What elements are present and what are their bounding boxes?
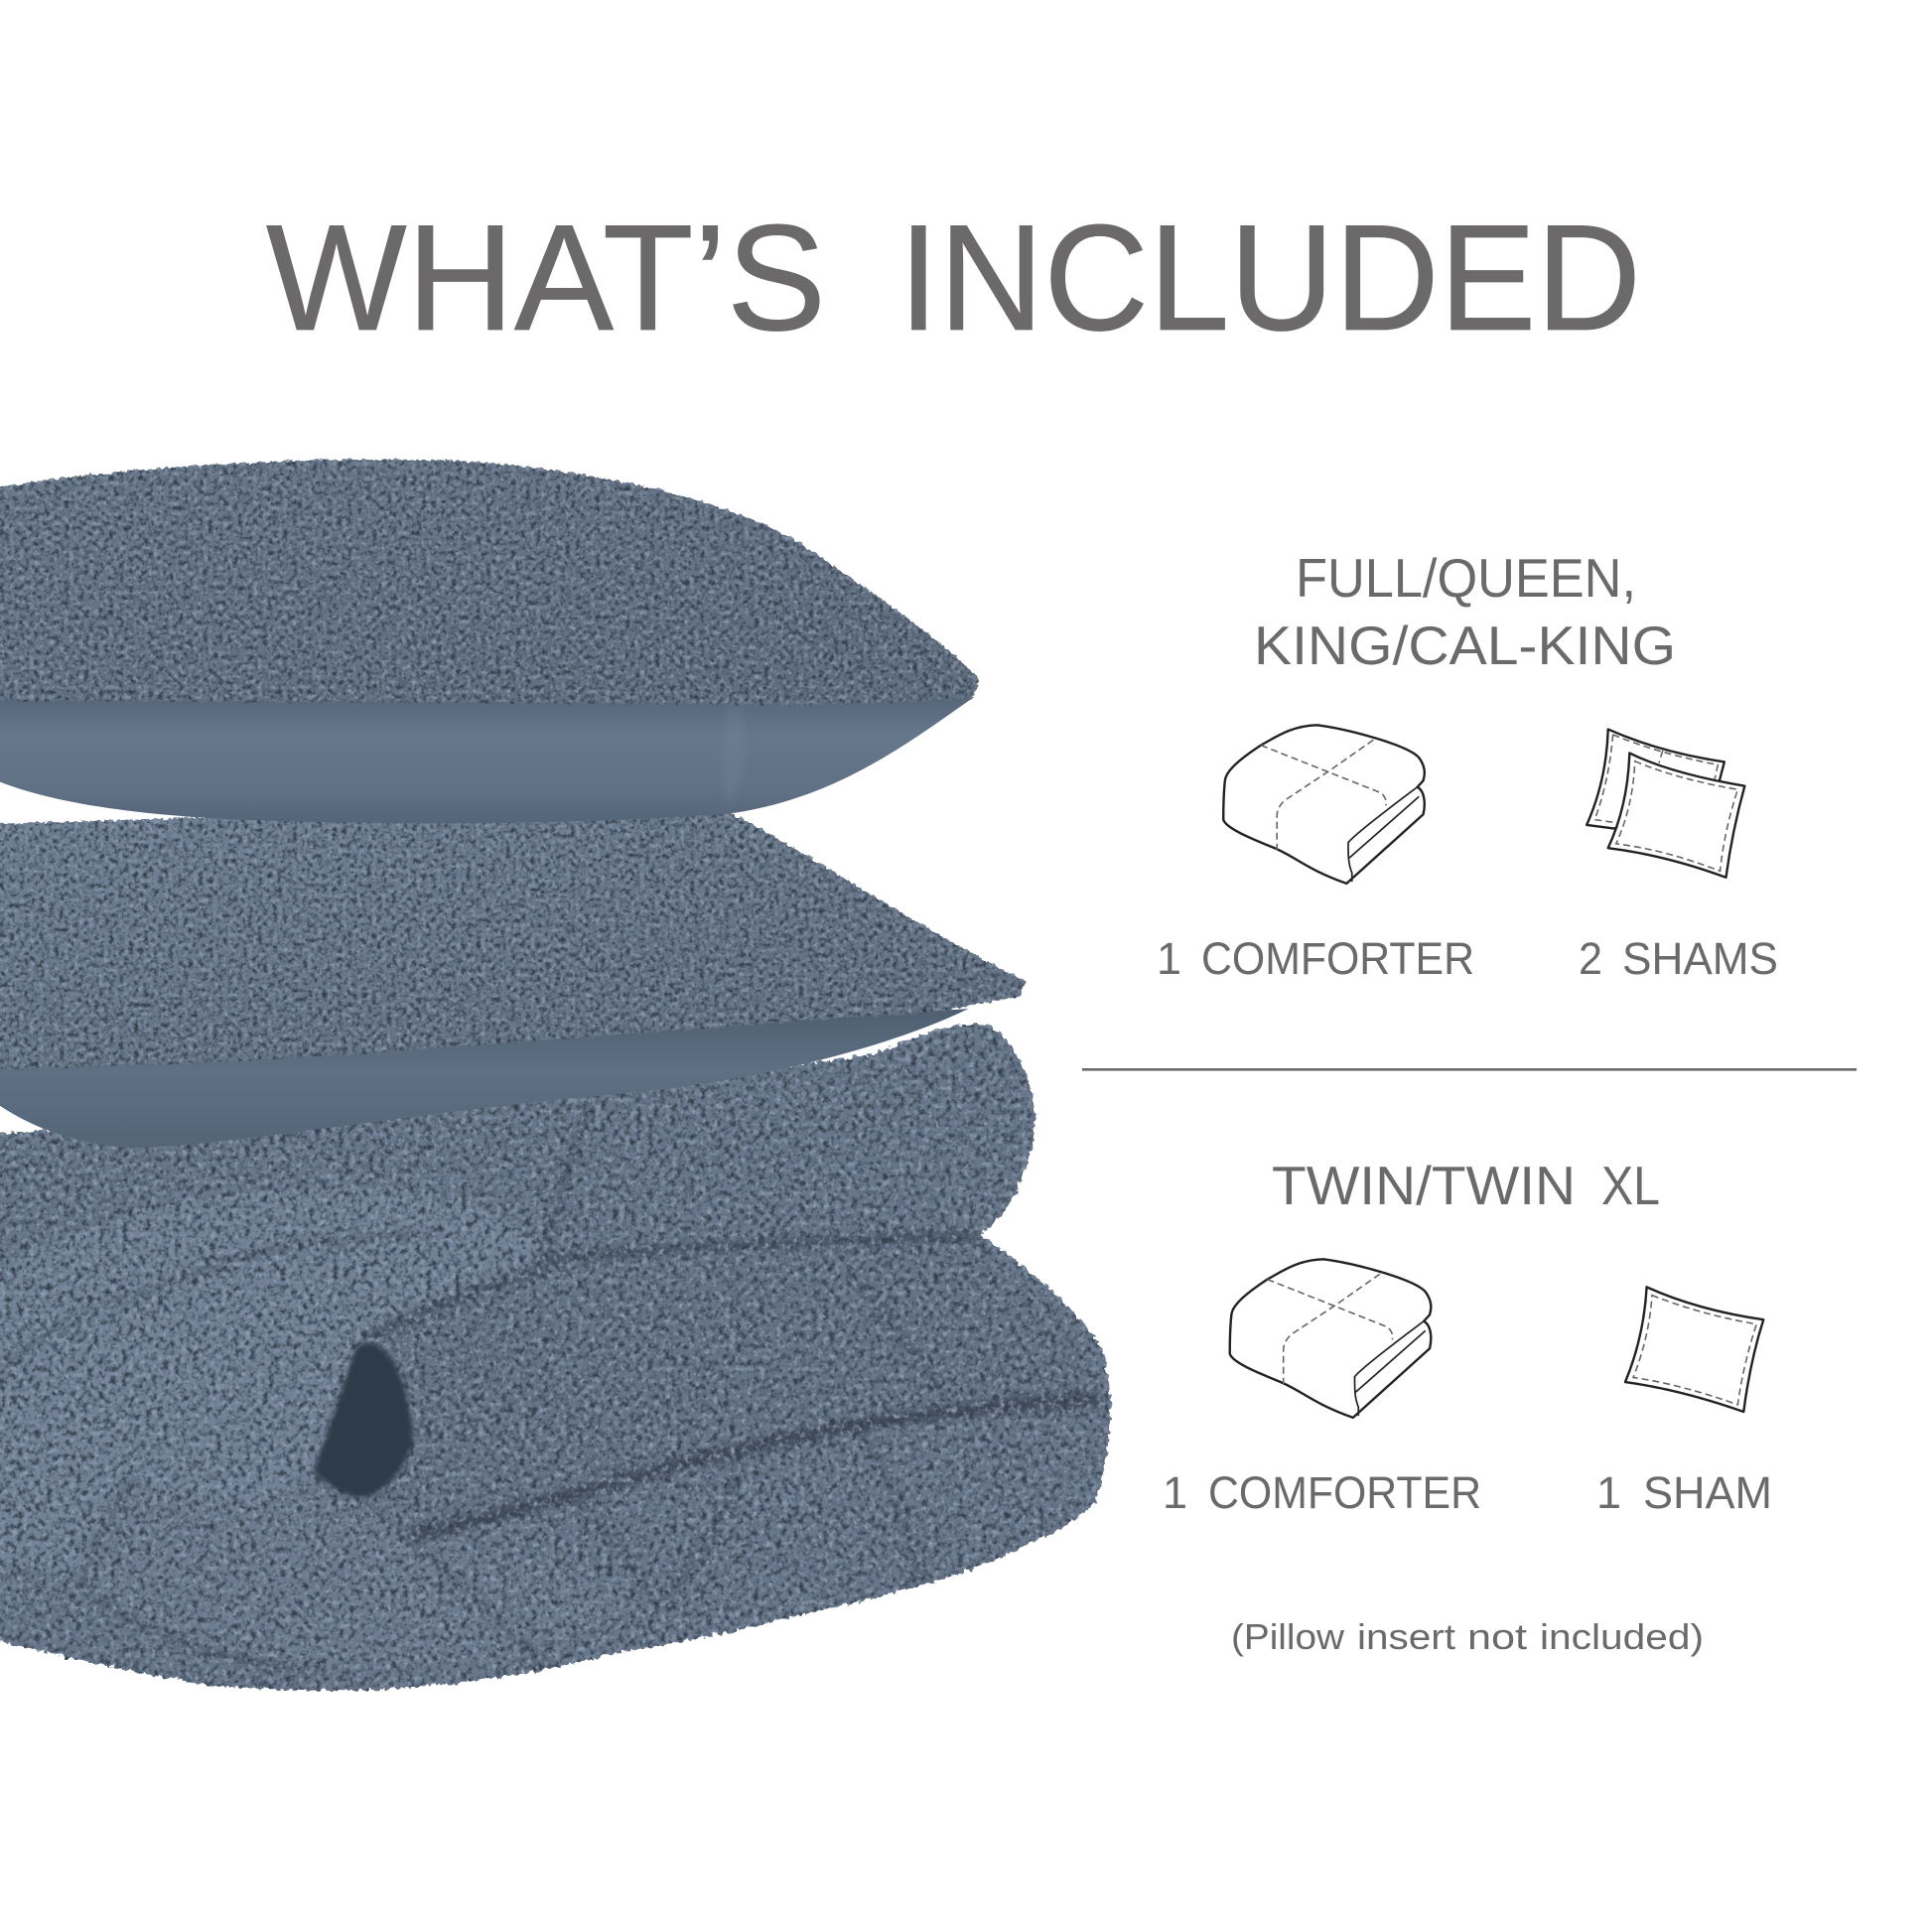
lower pillow fleece: [0, 811, 1026, 1070]
title: [266, 194, 1641, 362]
heading: king/cal-king: KING/CAL-KING: [1254, 615, 1676, 676]
label: 1 comforter: 1: [1163, 1467, 1187, 1518]
label: 2 shams: SHAMS: [1622, 933, 1778, 984]
comforter left fold: [0, 1187, 542, 1581]
lower pillow satin band: [0, 1009, 968, 1148]
infographic canvas: [0, 224, 1857, 1692]
label: 1 comforter: 1: [1157, 933, 1181, 984]
panel: full/queen and king/cal-king sizes: [1157, 547, 1778, 984]
divider: [1082, 1068, 1857, 1071]
note: pillow insert not included: insert: [1357, 1616, 1455, 1657]
comforter lower panel: [80, 1478, 648, 1668]
heading: twin/twin xl: TWIN/TWIN: [1272, 1155, 1576, 1216]
label: 1 sham: SHAM: [1643, 1467, 1772, 1518]
note: pillow insert not included: included): [1540, 1616, 1704, 1657]
label: 1 comforter: COMFORTER: [1201, 933, 1474, 984]
title: WHAT’S: [266, 194, 826, 362]
title: INCLUDED: [898, 194, 1641, 362]
comforter roll: [328, 1239, 1101, 1533]
upper pillow fleece: [0, 460, 979, 705]
heading: twin/twin xl: XL: [1601, 1155, 1660, 1216]
upper pillow satin band: [0, 697, 974, 823]
icon: folded comforter: [1230, 1259, 1431, 1418]
heading: full/queen: FULL/QUEEN,: [1296, 547, 1636, 609]
label: 1 sham: 1: [1596, 1467, 1621, 1518]
note: pillow insert not included: (Pillow: [1231, 1616, 1345, 1657]
note: pillow insert not included: [1231, 1616, 1704, 1657]
comforter inner fold opening: [314, 1343, 413, 1497]
label: 1 comforter: COMFORTER: [1208, 1467, 1481, 1518]
comforter creases: [0, 1099, 1101, 1672]
label: 2 shams: 2: [1579, 933, 1602, 984]
note: pillow insert not included: not: [1467, 1616, 1527, 1657]
panel: twin and twin XL sizes: [1163, 1155, 1772, 1657]
icon: two shams: [1587, 730, 1744, 878]
icon: folded comforter: [1223, 725, 1425, 884]
product photo: stacked pillows and folded comforter: [0, 460, 1110, 1690]
icon: one sham: [1625, 1287, 1763, 1412]
folded comforter: [0, 1024, 1110, 1690]
